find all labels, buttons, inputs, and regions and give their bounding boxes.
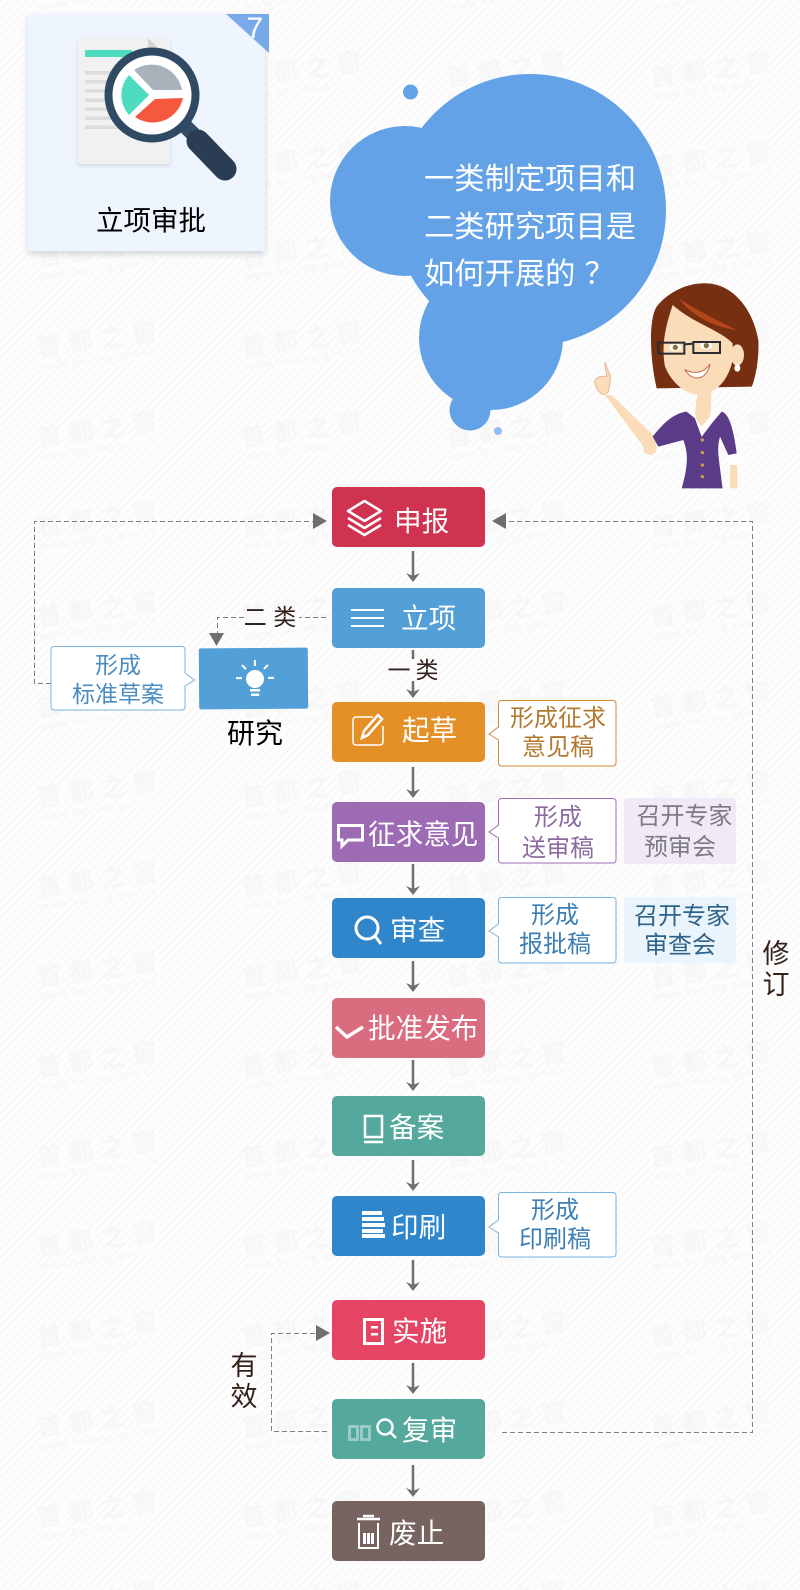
icon: lines (351, 609, 384, 627)
label: revise: 订 (762, 970, 790, 1000)
callout: standard draft: 标准草案 (72, 681, 164, 707)
step: 审查 (332, 898, 485, 958)
step: 申报: 申报 (394, 506, 449, 537)
icon: document and magnifier (76, 38, 236, 180)
step: 起草: 起草 (402, 715, 457, 746)
step: 起草 (332, 702, 485, 762)
callout: draft for comment: 形成征求 (510, 705, 606, 732)
panel: expert pre-review: 预审会 (644, 834, 716, 861)
icon: layers (346, 500, 382, 536)
icon: trash (357, 1514, 380, 1549)
illustration: woman pointing (594, 283, 758, 488)
callout: print draft: 形成 (531, 1197, 579, 1224)
arrows: main flow (406, 551, 420, 1497)
arrow: review valid loop back to implementation (272, 1325, 330, 1432)
step: 征求意见 (332, 802, 485, 862)
label: class one: 一类 (388, 657, 444, 683)
callout: print draft (488, 1192, 616, 1258)
callout: draft for review (488, 798, 616, 864)
bubble question text: 一类制定项目和 (424, 163, 636, 196)
arrow: standard draft back to application (34, 513, 327, 684)
research label: 研究 (227, 718, 283, 749)
step: 复审: 复审 (402, 1415, 457, 1446)
step: 复审 (332, 1399, 485, 1459)
icon: review (348, 1418, 397, 1441)
step: 实施: 实施 (392, 1316, 447, 1347)
panel: title card (28, 14, 265, 251)
callout: print draft: 印刷稿 (519, 1226, 591, 1253)
panel: expert pre-review: 召开专家 (636, 803, 732, 830)
icon: speech bubble (337, 824, 364, 850)
speech bubble (330, 74, 666, 435)
label: revise (762, 939, 790, 1000)
callout: draft for review: 形成 (534, 804, 582, 831)
callout: standard draft (50, 646, 196, 710)
label: valid: 效 (230, 1382, 258, 1412)
callout: draft for review: 送审稿 (522, 835, 594, 862)
step: 印刷: 印刷 (391, 1212, 446, 1243)
step: 批准发布 (332, 998, 485, 1058)
card number badge (226, 14, 269, 53)
step: 批准发布: 批准发布 (368, 1013, 478, 1044)
bubble question text: 二类研究项目是 (424, 210, 636, 244)
arrow: class two branch to research (209, 618, 326, 646)
step: 实施 (332, 1300, 485, 1360)
icon: edit (352, 713, 384, 746)
callout: draft for comment: 意见稿 (522, 734, 594, 761)
label: valid: 有 (230, 1351, 258, 1381)
icon: book (364, 1114, 384, 1144)
step: 征求意见: 征求意见 (368, 819, 478, 850)
panel: expert review: 审查会 (644, 932, 716, 959)
step: 印刷 (332, 1196, 485, 1256)
step: 废止 (332, 1501, 485, 1561)
icon: light bulb (236, 660, 274, 696)
arrow: revision loop back to application (492, 513, 752, 1432)
icon: magnifier (354, 916, 382, 945)
callout: standard draft: 形成 (95, 652, 141, 678)
step: 立项: 立项 (401, 603, 456, 634)
callout: draft for approval (488, 897, 616, 964)
research box (199, 648, 308, 709)
bubble question text: 如何开展的 ？ (424, 258, 615, 291)
step: 审查: 审查 (390, 915, 445, 946)
step: 备案 (332, 1096, 485, 1156)
step: 立项 (332, 588, 485, 648)
bubble question text (424, 163, 636, 291)
step: 备案: 备案 (389, 1112, 444, 1143)
callout: draft for approval: 报批稿 (519, 931, 591, 958)
card number badge: 7 (246, 12, 263, 45)
callout: draft for comment (488, 700, 616, 766)
panel: expert review: 召开专家 (634, 903, 730, 930)
label: class two: 二 类 (244, 604, 296, 630)
icon: check (334, 1026, 364, 1040)
callout: draft for approval: 形成 (531, 902, 579, 929)
label: revise: 修 (762, 939, 790, 969)
card title: 立项审批 (96, 205, 206, 236)
panel: expert review (624, 897, 736, 963)
icon: document (363, 1318, 384, 1345)
step: 申报 (332, 487, 485, 547)
panel: expert pre-review (624, 798, 736, 864)
label: valid (230, 1351, 258, 1412)
icon: text stack (362, 1211, 385, 1238)
step: 废止: 废止 (389, 1518, 444, 1549)
